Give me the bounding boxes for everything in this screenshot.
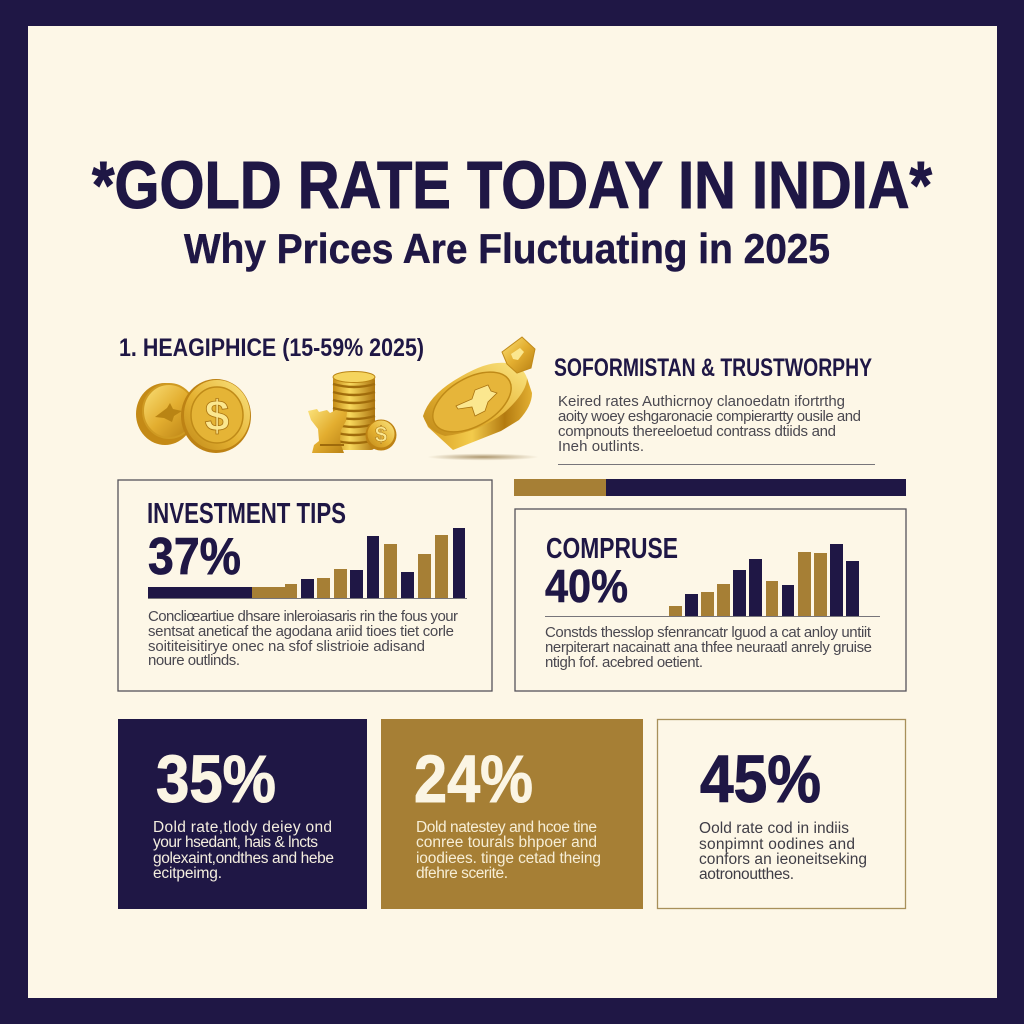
text block: 24% [416, 819, 601, 882]
text block: investment tips: Concliœartiue dhsare inleroiasaris rin the fous your [148, 608, 458, 625]
bar chart: investment tips [148, 528, 467, 599]
card: 45% [658, 720, 906, 908]
stat: 35%: 35% [156, 742, 276, 817]
heading: investment tips: INVESTMENT TIPS [147, 498, 346, 530]
text block: trustworthy: Ineh outlints. [558, 438, 644, 455]
text block: 35% [153, 819, 334, 882]
heading: compruse: COMPRUSE [546, 533, 678, 565]
icon: tilted large gold coin with pentagon tag [423, 337, 539, 460]
stat: 45%: 45% [700, 742, 821, 817]
text block: trustworthy: aoity woey eshgaronacie compierartty ousile and [558, 408, 861, 425]
text block: compruse [545, 624, 872, 671]
icon: coin stack with rook and small coin: $ [375, 422, 387, 447]
subtitle: Why Prices Are Fluctuating in 2025 [184, 225, 830, 272]
stat: 40%: 40% [545, 560, 628, 612]
card: 24% [381, 719, 643, 909]
text block: 45%: confors an ieoneitseking [699, 851, 867, 868]
text block: 24%: dfehre scerite. [416, 865, 508, 882]
section heading: price: 1. HEAGIPHICE (15-59% 2025) [119, 334, 424, 362]
text block: trustworthy [558, 393, 875, 465]
panel: investment tips [118, 480, 492, 691]
text block: 35%: Dold rate,tlody deiey ond [153, 819, 332, 836]
text block: trustworthy: Keired rates Authicrnoy clanoedatn ifortrthg [558, 393, 845, 410]
text block: 35%: golexaint,ondthes and hebe [153, 850, 334, 867]
text block: trustworthy: compnouts thereeloetud contrass dtiids and [558, 423, 836, 440]
text block: 35%: your hsedant, hais & lncts [153, 834, 318, 851]
text block: investment tips [148, 608, 458, 669]
text block: 35%: ecitpeimg. [153, 865, 222, 882]
stat: 37%: 37% [148, 528, 241, 586]
text block: investment tips: noure outlinds. [148, 652, 240, 669]
text block: compruse: nerpiterart nacainatt ana thfee neuraatl anrely gruise [545, 639, 872, 656]
text block: 45% [699, 820, 867, 883]
icon: two gold coins: $ [205, 392, 229, 441]
text block: compruse: ntigh fof. acebred oetient. [545, 654, 703, 671]
text block: 24%: Dold natestey and hcoe tine [416, 819, 597, 836]
text block: 24%: conree tourals bhpoer and [416, 834, 597, 851]
panel: compruse [515, 509, 906, 691]
text block: investment tips: soititeisitirye onec na sfof slistrioie adisand [148, 638, 425, 655]
icon: coin stack with rook and small coin [308, 372, 396, 453]
icon: two gold coins [136, 379, 251, 453]
text block: 45%: Oold rate cod in indiis [699, 820, 849, 837]
text block: 45%: sonpimnt oodines and [699, 836, 855, 853]
text block: 45%: aotronoutthes. [699, 866, 794, 883]
text block: compruse: Constds thesslop sfenrancatr lguod a cat anloy untiit [545, 624, 872, 641]
bar chart: compruse [545, 544, 880, 617]
accent bar [514, 479, 906, 496]
text block: 24%: ioodiees. tinge cetad theing [416, 850, 601, 867]
heading: trustworthy: SOFORMISTAN & TRUSTWORPHY [554, 354, 872, 382]
card: 35% [118, 719, 367, 909]
stat: 24%: 24% [414, 742, 533, 817]
text block: investment tips: sentsat aneticaf the agodana ariid tioes tiet corle [148, 623, 454, 640]
